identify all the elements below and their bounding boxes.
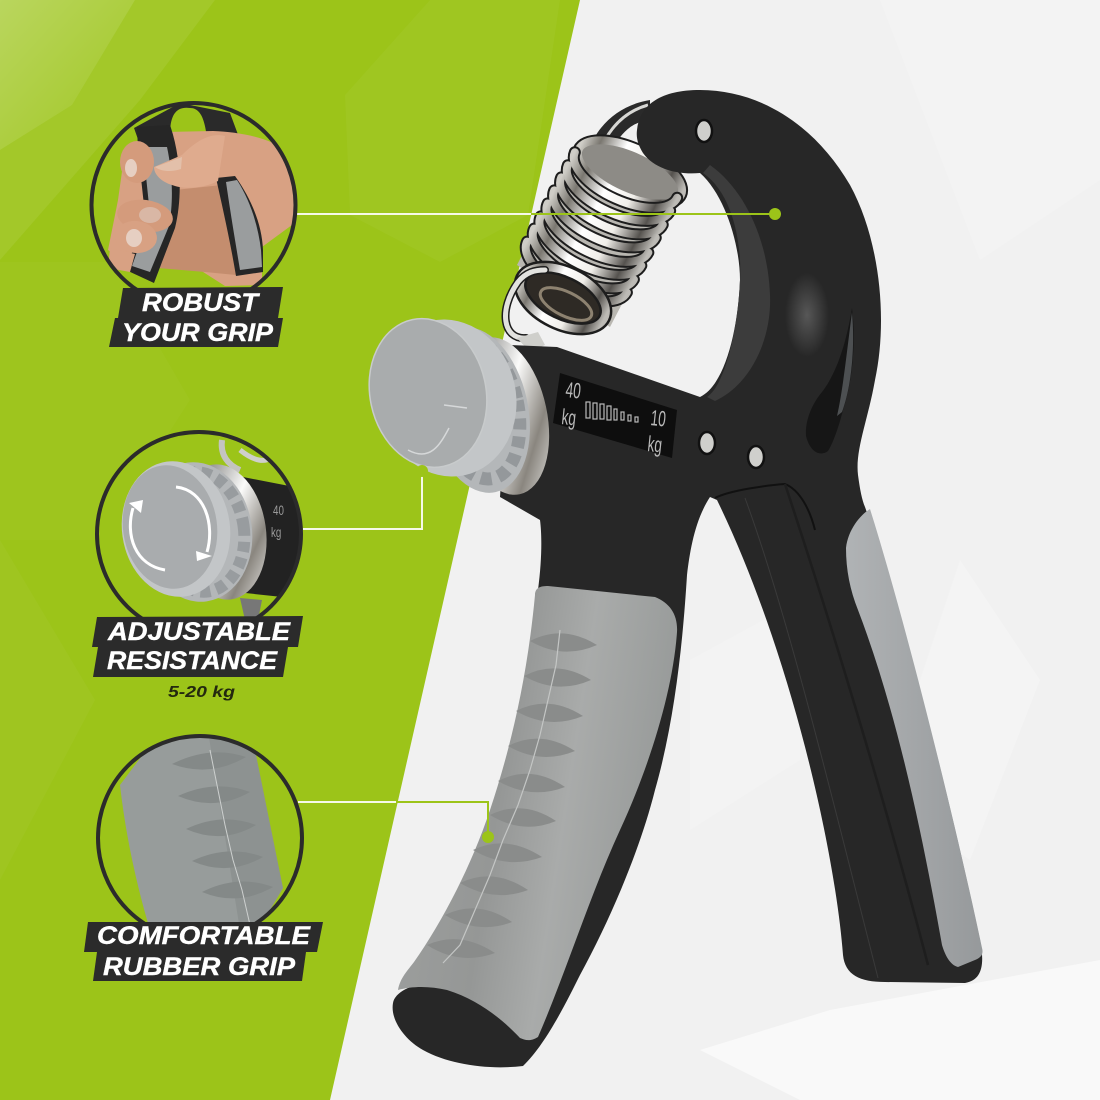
right handle seam	[745, 498, 878, 978]
label: adjustable resistance	[92, 616, 303, 677]
label: comfortable rubber grip: RUBBER GRIP	[103, 953, 295, 981]
gripper black body	[393, 90, 982, 1067]
grip seam	[443, 630, 560, 963]
text: resistance range: 5-20 kg	[168, 684, 235, 701]
fingers	[120, 141, 154, 183]
palm	[108, 131, 300, 286]
hand gripper product	[356, 90, 983, 1067]
scale plate: kg	[560, 404, 577, 430]
label: robust your grip: ROBUST	[142, 289, 261, 317]
black arm	[243, 477, 299, 596]
grip ribs	[172, 752, 273, 898]
inset circle: rubber grip close-up	[96, 734, 304, 922]
spring upper hook	[593, 100, 650, 150]
slot in ring	[806, 308, 854, 453]
gripper top arch	[134, 105, 238, 138]
arm scale text: 40	[273, 502, 284, 518]
scale plate: kg	[646, 431, 663, 457]
label: adjustable resistance: RESISTANCE	[107, 647, 278, 675]
rivets	[696, 120, 764, 468]
spring loops	[222, 440, 240, 470]
grip ribs	[427, 633, 597, 958]
inset circle: adjustable dial	[95, 430, 303, 617]
thumb	[154, 135, 225, 188]
seam	[210, 750, 250, 925]
scale plate: 10	[649, 405, 667, 431]
spring coil	[506, 127, 691, 352]
scale plate: 40	[564, 377, 582, 403]
connector: grip strength line	[297, 208, 781, 220]
connector: rubber grip line	[298, 802, 494, 843]
left handle	[126, 125, 180, 283]
rotation arrows	[130, 487, 210, 570]
right handle	[216, 176, 263, 276]
background: green diagonal panel	[0, 0, 580, 1100]
left grip grey rubber	[398, 586, 677, 1040]
ring highlight	[785, 273, 829, 357]
ring inner band	[703, 165, 770, 401]
ribbed collar	[180, 462, 252, 602]
grip band	[120, 738, 283, 922]
inset circle: hand squeezing gripper	[90, 101, 298, 288]
label: robust your grip: YOUR GRIP	[122, 319, 273, 347]
adjustment dial	[356, 307, 563, 503]
label: robust your grip	[109, 287, 283, 347]
label: comfortable rubber grip	[84, 922, 323, 981]
scale plate	[553, 373, 677, 458]
dial face	[122, 465, 218, 589]
inset circle: adjustable dial: kg	[271, 524, 281, 540]
metal collar	[209, 464, 267, 600]
finger nails	[125, 159, 137, 177]
label: comfortable rubber grip: COMFORTABLE	[97, 922, 311, 950]
connector: adjustable resistance line	[303, 465, 428, 529]
right handle grey strip	[846, 509, 983, 967]
label: adjustable resistance: ADJUSTABLE	[107, 618, 291, 646]
